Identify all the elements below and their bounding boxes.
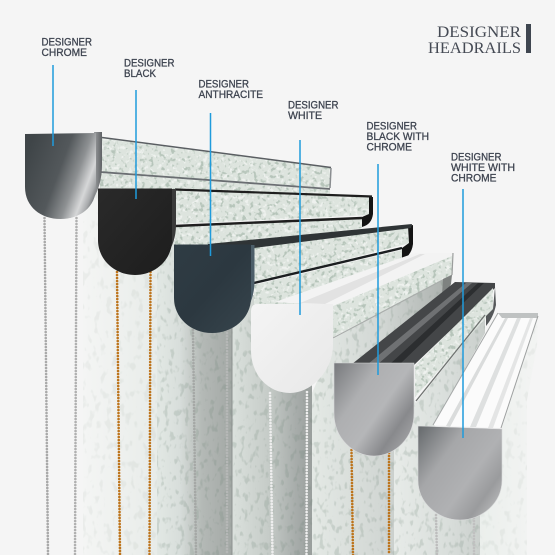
label: designer black with chrome: BLACK WITH	[366, 131, 429, 143]
rail: chrome	[100, 138, 331, 196]
fabric drop: chrome	[83, 190, 157, 555]
end cap: white with chrome	[418, 426, 502, 520]
rail: black with chrome	[352, 282, 496, 401]
blind: designer white	[251, 253, 453, 555]
chains: silver	[44, 218, 76, 555]
blind: designer anthracite	[174, 224, 413, 555]
label: designer white	[288, 100, 339, 122]
chains: silver on fabric	[193, 330, 227, 555]
chains: orange on fabric	[352, 450, 389, 555]
label: designer white with chrome: WHITE WITH	[451, 162, 515, 174]
label: designer chrome	[42, 36, 92, 59]
fabric drop: anthracite	[232, 295, 312, 555]
fabric drop: black	[157, 240, 232, 555]
label: designer black: BLACK	[124, 68, 157, 80]
label: designer white with chrome: DESIGNER	[451, 152, 502, 164]
label: designer black with chrome	[366, 120, 429, 154]
blind: designer chrome	[25, 132, 331, 555]
label: designer white with chrome: CHROME	[451, 173, 496, 185]
end cap: anthracite	[174, 244, 254, 333]
label: designer white with chrome	[451, 152, 515, 185]
chains: white	[270, 392, 307, 555]
label: designer white: WHITE	[288, 110, 322, 122]
label: designer white: DESIGNER	[288, 100, 339, 112]
rail: black	[175, 190, 373, 250]
pointer lines	[53, 65, 463, 438]
chains: pale	[436, 515, 474, 555]
blind: designer black with chrome	[334, 282, 496, 555]
label: designer anthracite: DESIGNER	[198, 78, 249, 90]
label: designer black with chrome: DESIGNER	[366, 120, 417, 132]
label: designer black: DESIGNER	[124, 58, 175, 70]
end cap: chrome	[25, 132, 102, 219]
chains: orange	[117, 272, 150, 555]
fabric drop: white	[312, 278, 443, 555]
label: designer anthracite	[198, 78, 263, 101]
end cap: black	[98, 188, 176, 275]
end cap: white	[251, 304, 333, 393]
title	[428, 24, 531, 57]
label: designer anthracite: ANTHRACITE	[198, 89, 263, 101]
rail: white with chrome	[433, 313, 538, 428]
label: designer black	[124, 58, 175, 80]
label: designer chrome: CHROME	[42, 47, 87, 59]
title: DESIGNER	[437, 24, 521, 41]
blind: designer white with chrome	[418, 313, 538, 555]
fabric drop: black with chrome	[394, 316, 485, 555]
fabric drop: white with chrome	[480, 317, 538, 555]
title: HEADRAILS	[428, 40, 521, 57]
rail: white	[275, 253, 453, 338]
rail: anthracite	[208, 224, 413, 305]
end cap: black with chrome	[334, 363, 414, 456]
label: designer black with chrome: CHROME	[366, 142, 412, 154]
blind: designer black	[98, 188, 373, 555]
label: designer chrome: DESIGNER	[42, 36, 92, 48]
